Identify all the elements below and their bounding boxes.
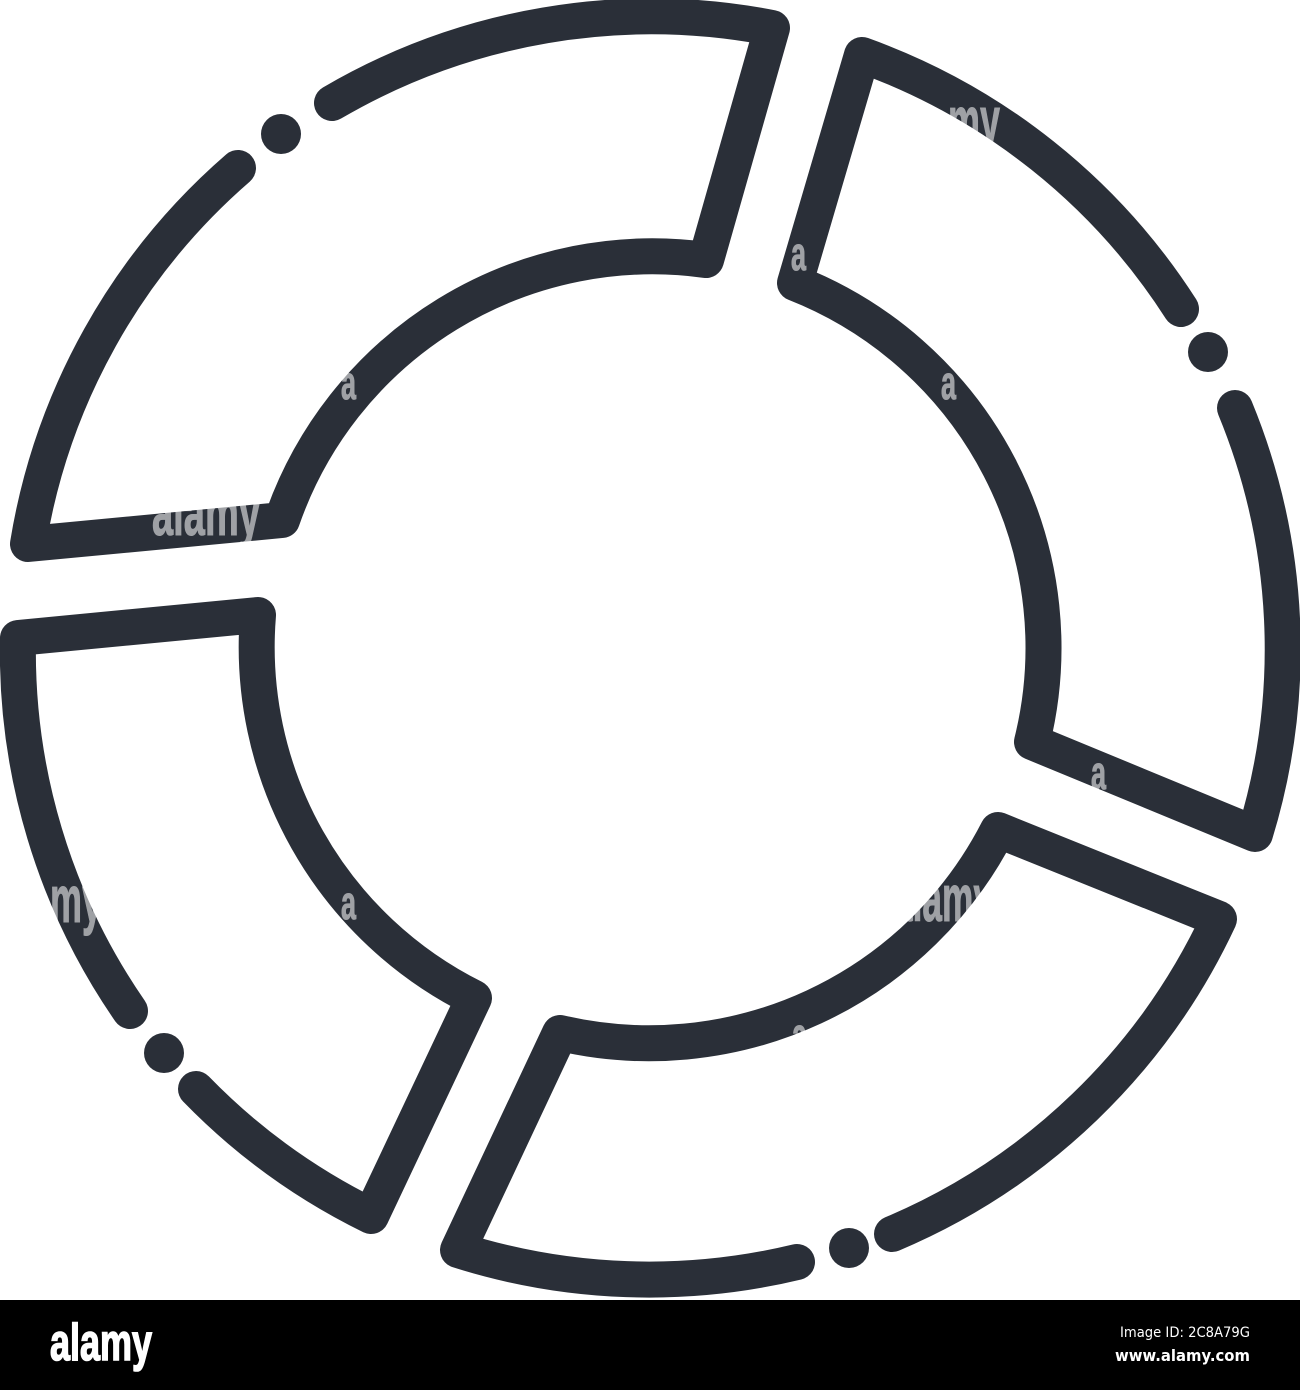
footer logo: alamy: [50, 1314, 152, 1372]
watermarks: alamy: [152, 477, 260, 549]
watermarks: a: [1091, 746, 1106, 799]
segment: bottom right: [458, 830, 1219, 1280]
dot: right gap: [1188, 332, 1228, 372]
watermarks: a: [341, 356, 356, 409]
watermarks: my: [50, 862, 102, 936]
watermarks: a: [792, 1008, 807, 1061]
website: www.alamy.com: [1115, 1346, 1250, 1365]
dots in ring gaps: [144, 114, 1228, 1268]
watermarks: alamy: [893, 861, 993, 935]
watermarks: a: [341, 876, 356, 929]
dot: bottom left gap: [144, 1033, 184, 1073]
dot: top left gap: [261, 114, 301, 154]
watermarks: a: [791, 227, 806, 280]
segment: bottom left: [18, 615, 474, 1216]
segment: top right: [795, 55, 1283, 834]
footer bar: [0, 1300, 1300, 1390]
segment: top left: [28, 16, 772, 544]
watermarks: my: [948, 83, 1000, 157]
watermarks: a: [941, 356, 956, 409]
image id: Image ID: 2C8A79G: [1120, 1325, 1250, 1341]
dot: bottom gap: [829, 1228, 869, 1268]
watermarks: [50, 83, 1106, 1061]
